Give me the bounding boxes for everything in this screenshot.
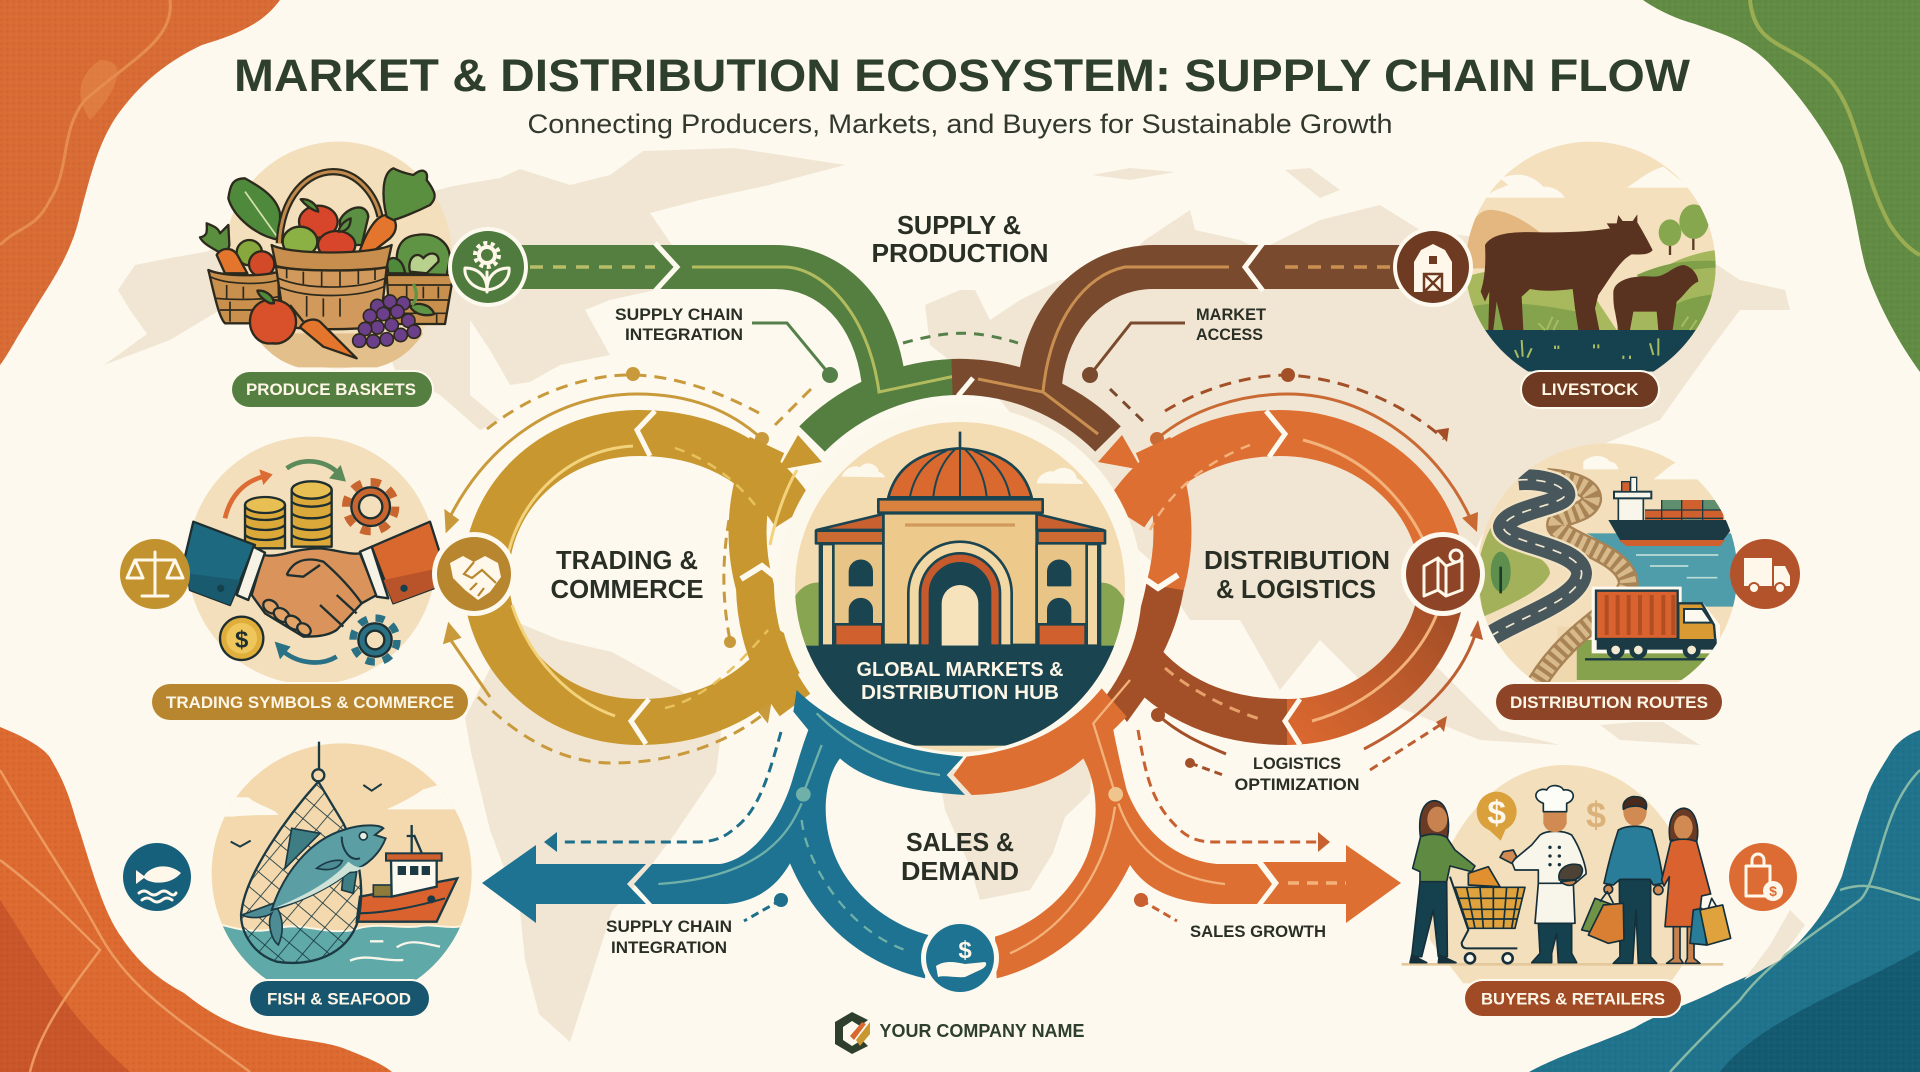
label: livestock: LIVESTOCK bbox=[1542, 380, 1639, 399]
icon: plant and gear medallion bbox=[448, 227, 528, 307]
heading: supply and production: SUPPLY & bbox=[897, 210, 1021, 240]
note: market access bbox=[1196, 306, 1266, 344]
dashed connector: distribution top bbox=[1150, 368, 1478, 532]
hub label: GLOBAL MARKETS & bbox=[856, 658, 1064, 681]
note: market access: ACCESS bbox=[1196, 326, 1263, 344]
ring: trading and commerce bbox=[486, 411, 822, 744]
person: woman with cart bbox=[1410, 801, 1525, 963]
note: supply chain integration bottom: SUPPLY CHAIN bbox=[606, 918, 732, 936]
illustration: buyers and retailers: $ bbox=[1487, 795, 1506, 832]
icon: barn medallion bbox=[1393, 227, 1473, 307]
icon: fish medallion bbox=[123, 843, 191, 911]
illustration: buyers and retailers bbox=[1402, 765, 1731, 983]
icon: shopping bag medallion: $ bbox=[1769, 883, 1777, 899]
illustration: buyers and retailers: $ bbox=[1586, 794, 1606, 835]
heading: supply and production: PRODUCTION bbox=[872, 238, 1048, 268]
connector: logistics optimization leaders bbox=[1151, 620, 1483, 775]
person: chef bbox=[1500, 786, 1586, 963]
heading: trading and commerce: TRADING & bbox=[556, 545, 698, 575]
heading: sales and demand bbox=[901, 827, 1019, 886]
illustration: livestock bbox=[1467, 142, 1716, 372]
label: livestock bbox=[1520, 370, 1660, 409]
heading: trading and commerce: COMMERCE bbox=[550, 574, 704, 604]
person: man with bags bbox=[1582, 797, 1663, 963]
label: produce baskets bbox=[229, 370, 434, 409]
heading: distribution and logistics: DISTRIBUTION bbox=[1204, 545, 1390, 575]
icon: scales medallion bbox=[120, 539, 190, 609]
illustration: produce baskets bbox=[200, 142, 453, 368]
person: woman with bags bbox=[1662, 808, 1731, 963]
heading: distribution and logistics bbox=[1204, 545, 1390, 604]
logo: company name: YOUR COMPANY NAME bbox=[880, 1021, 1084, 1041]
illustration: trading symbols and commerce: $ bbox=[235, 626, 248, 653]
band: teal sales arrow bbox=[482, 690, 965, 978]
corner: bottom left orange wave bbox=[0, 727, 392, 1072]
title: MARKET & DISTRIBUTION ECOSYSTEM: SUPPLY CHAIN FLOW bbox=[234, 50, 1691, 101]
note: logistics optimization: OPTIMIZATION bbox=[1234, 776, 1360, 794]
band: green supply arrow bbox=[488, 243, 968, 439]
dashed connector: supply top bbox=[752, 323, 1185, 425]
note: supply chain integration top: SUPPLY CHAIN bbox=[615, 306, 743, 324]
label: distribution routes bbox=[1494, 682, 1724, 722]
note: supply chain integration bottom: INTEGRATION bbox=[611, 939, 727, 957]
label: fish and seafood bbox=[248, 979, 431, 1018]
hub label: DISTRIBUTION HUB bbox=[861, 681, 1059, 704]
dashed connector: trading top bbox=[446, 367, 811, 530]
corner: bottom right teal wave bbox=[1529, 730, 1920, 1072]
illustration: distribution routes bbox=[1479, 443, 1736, 682]
icon: shopping bag medallion bbox=[1729, 843, 1797, 911]
central hub disc backing bbox=[778, 405, 1142, 769]
illustration: fish and seafood bbox=[210, 740, 477, 980]
logo: company name bbox=[835, 1012, 1084, 1054]
heading: sales and demand: DEMAND bbox=[901, 856, 1019, 886]
note: supply chain integration top: INTEGRATION bbox=[625, 326, 743, 344]
label: produce baskets: PRODUCE BASKETS bbox=[246, 380, 416, 399]
central hub bbox=[795, 422, 1125, 752]
note: supply chain integration top bbox=[615, 306, 743, 344]
label: buyers and retailers: BUYERS & RETAILERS bbox=[1481, 990, 1665, 1008]
note: market access: MARKET bbox=[1196, 306, 1266, 324]
dashed connector: trading bottom bbox=[445, 520, 770, 763]
note: logistics optimization: LOGISTICS bbox=[1253, 755, 1341, 773]
heading: supply and production bbox=[872, 210, 1048, 268]
note: logistics optimization bbox=[1234, 755, 1360, 794]
band: brown production arrow bbox=[952, 243, 1433, 439]
label: trading symbols and commerce: TRADING SYMBOLS & COMMERCE bbox=[166, 693, 454, 712]
icon: truck medallion bbox=[1730, 539, 1800, 609]
world map background bbox=[104, 148, 1805, 1042]
label: trading symbols and commerce bbox=[150, 682, 470, 722]
icon: hand with dollar medallion bbox=[921, 919, 999, 997]
label: fish and seafood: FISH & SEAFOOD bbox=[267, 990, 411, 1008]
subtitle: Connecting Producers, Markets, and Buyers for Sustainable Growth bbox=[528, 109, 1392, 139]
hub label bbox=[856, 658, 1064, 704]
ring: distribution and logistics bbox=[1098, 411, 1442, 745]
corner: top left orange wave bbox=[0, 0, 280, 365]
icon: map pin medallion bbox=[1401, 532, 1485, 616]
heading: distribution and logistics: & LOGISTICS bbox=[1216, 574, 1376, 604]
label: buyers and retailers bbox=[1463, 979, 1683, 1018]
heading: trading and commerce bbox=[550, 545, 704, 604]
note: sales growth: SALES GROWTH bbox=[1190, 923, 1326, 941]
note: supply chain integration bottom bbox=[606, 918, 732, 957]
illustration: trading symbols and commerce bbox=[185, 437, 440, 685]
band: orange demand arrow bbox=[953, 680, 1401, 978]
corner: top right green wave bbox=[1643, 0, 1920, 372]
heading: sales and demand: SALES & bbox=[906, 827, 1014, 857]
label: distribution routes: DISTRIBUTION ROUTES bbox=[1510, 693, 1708, 712]
icon: handshake medallion bbox=[432, 532, 516, 616]
icon: hand with dollar medallion: $ bbox=[958, 937, 972, 964]
